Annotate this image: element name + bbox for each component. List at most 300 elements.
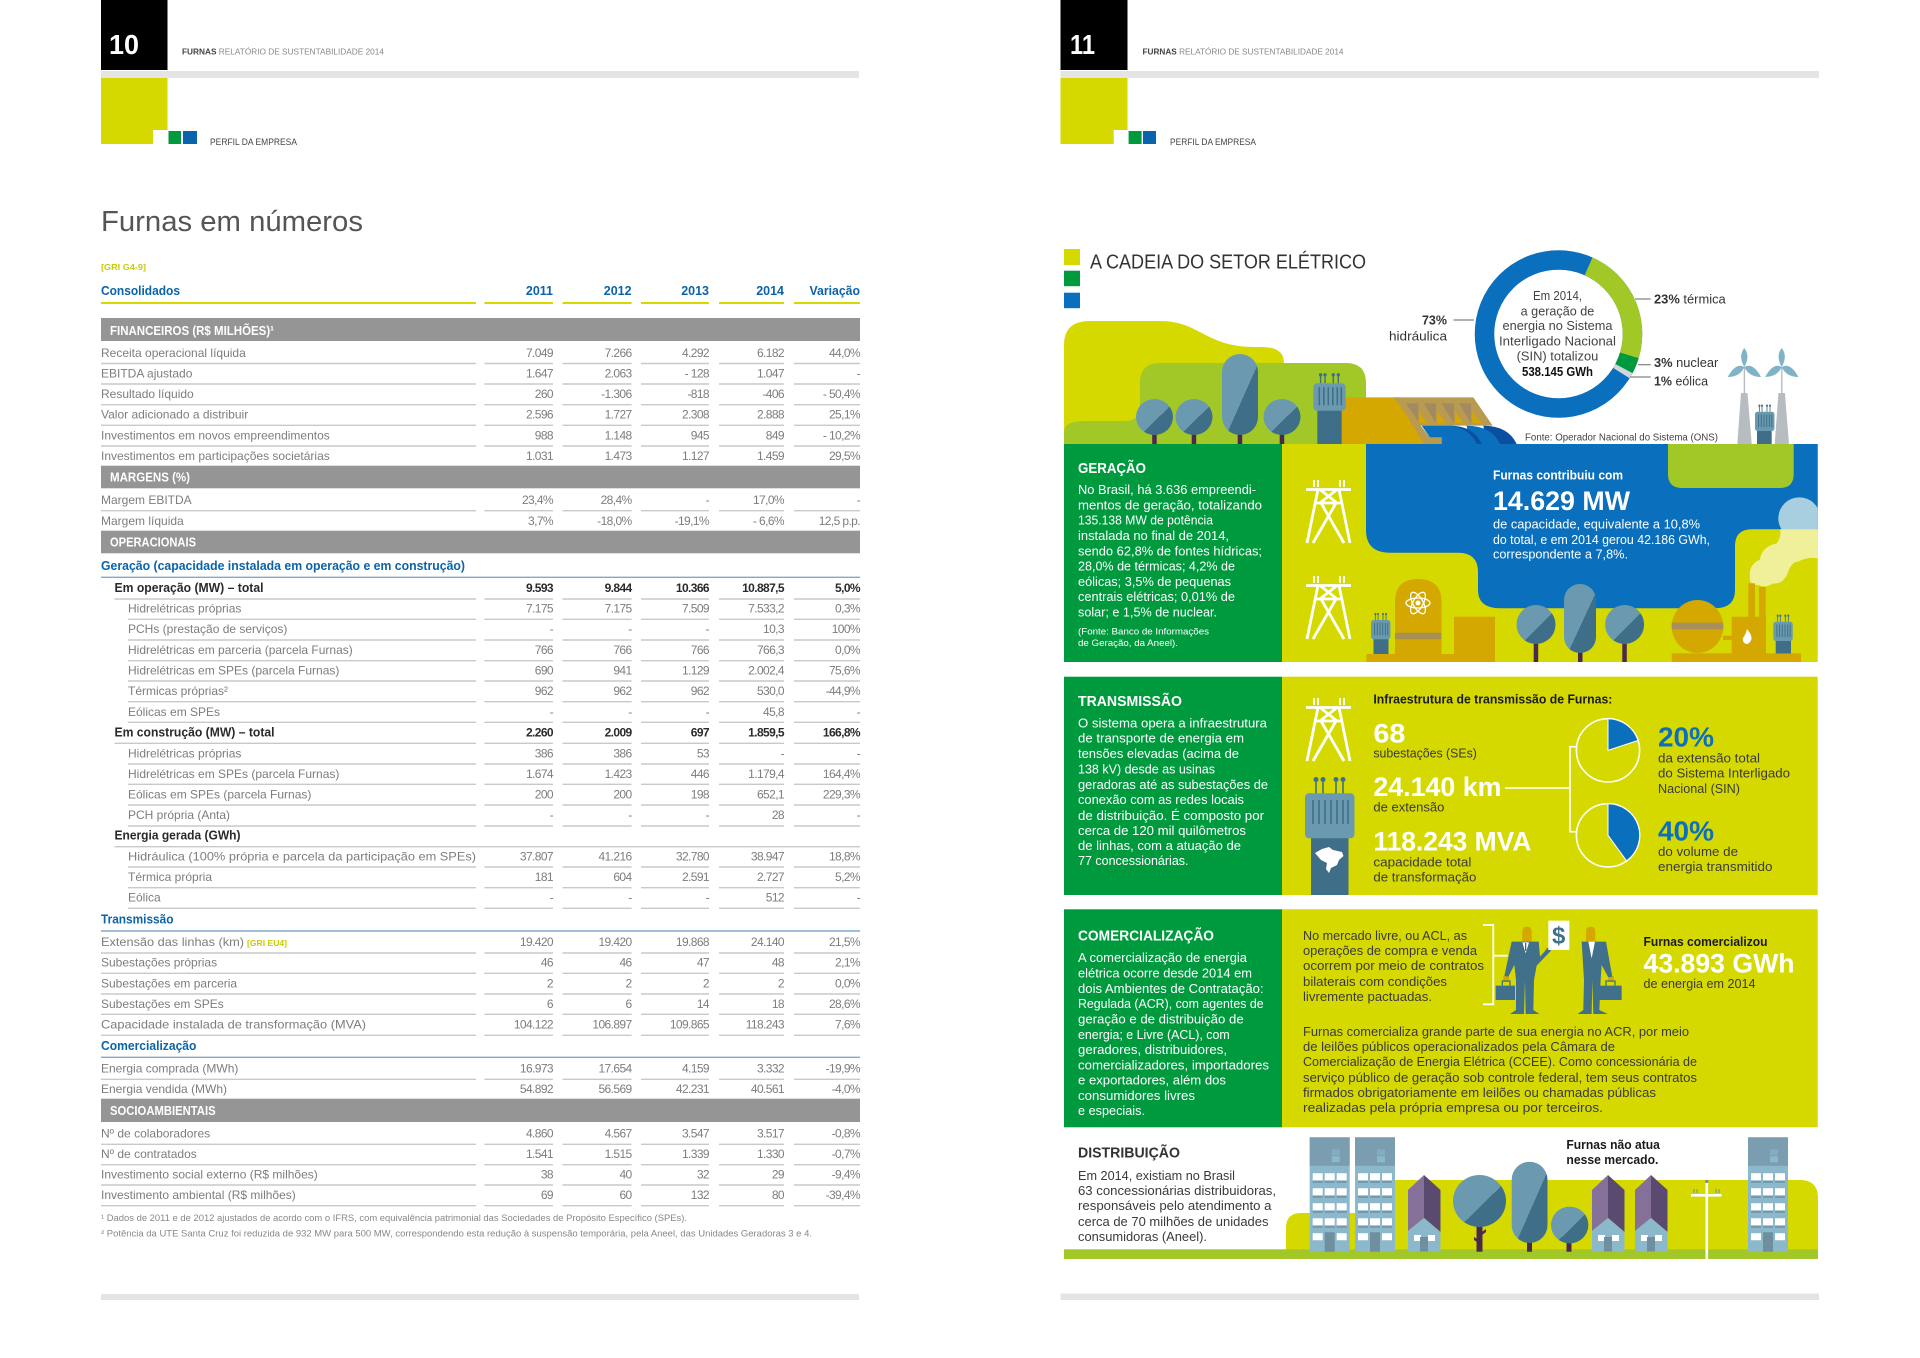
table header: 2012 (604, 284, 632, 298)
subsection: geração: 45,8 (763, 705, 785, 719)
distribuição text: 63 concessionárias distribuidoras, (1078, 1184, 1276, 1198)
pie stat: 20%: Nacional (SIN) (1658, 782, 1740, 796)
subsection: transmissão: 2,1% (835, 956, 861, 970)
source note: Fonte: Operador Nacional do Sistema (ONS) (1525, 432, 1718, 444)
donut centre text: 538.145 GWh (1522, 365, 1593, 379)
transmission stats: de extensão (1373, 800, 1444, 814)
section: financeiros: 1.031 (526, 449, 554, 463)
subsection: transmissão: 6 (547, 997, 554, 1011)
section: financeiros: - 10,2% (823, 428, 861, 442)
subsection: geração: 200 (613, 788, 633, 802)
transmission stats (1373, 692, 1612, 884)
section: margens: Margem EBITDA (101, 493, 192, 507)
pie stat: 20%: 20% (1658, 722, 1714, 753)
subsection: geração: 32.780 (676, 850, 710, 864)
subsection: geração: - (550, 890, 554, 904)
subsection: geração: - (857, 746, 861, 760)
donut centre text: Interligado Nacional (1499, 335, 1616, 349)
heading: a cadeia do setor elétrico: A CADEIA DO SETOR ELÉTRICO (1090, 251, 1366, 274)
subsection: transmissão: 21,5% (829, 935, 861, 949)
subsection: geração: Térmicas próprias² (128, 684, 228, 698)
subsection: geração: 2.260 (526, 726, 554, 740)
subsection: geração: 386 (613, 746, 633, 760)
transmissão heading: TRANSMISSÃO (1078, 692, 1182, 710)
transmission stats: Infraestrutura de transmissão de Furnas: (1373, 692, 1612, 706)
subsection: geração: 2.009 (605, 726, 633, 740)
subsection: transmissão: 46 (541, 956, 554, 970)
subsection: transmissão: 28,6% (829, 997, 861, 1011)
subsection: comercialização: 40.561 (751, 1082, 785, 1096)
section: socioambientais: -9,4% (832, 1168, 861, 1182)
subsection: comercialização: Comercialização (101, 1038, 196, 1053)
subsection: geração: 7.509 (682, 602, 710, 616)
page 11 (1060, 0, 1820, 1300)
mercado livre text: livremente pactuadas. (1303, 990, 1432, 1004)
section: financeiros: 2.308 (682, 408, 710, 422)
pie stat: 40%: do volume de (1658, 845, 1738, 859)
donut chart (1389, 260, 1726, 408)
transmission stats: capacidade total (1373, 856, 1471, 870)
callout: furnas contribuiu (1493, 468, 1710, 562)
section: margens: 17,0% (753, 493, 785, 507)
page 10 header: FURNAS RELATÓRIO DE SUSTENTABILIDADE 2014 (182, 46, 384, 56)
subsection: geração: - (628, 808, 632, 822)
cloud and smoke (1750, 497, 1820, 586)
callout: furnas comercializou: Furnas comercializou (1644, 935, 1768, 949)
subsection: geração: 53 (697, 746, 710, 760)
donut labels (1389, 292, 1726, 388)
subsection: geração: 386 (535, 746, 554, 760)
section: margens: 23,4% (522, 493, 554, 507)
icon: pylon 1 (1306, 480, 1351, 543)
table header: 2011 (526, 284, 553, 298)
section: financeiros: FINANCEIROS (R$ MILHÕES)¹ (110, 323, 274, 338)
section: socioambientais: 4.567 (605, 1126, 633, 1140)
transmissão text: geradoras até as subestações de (1078, 778, 1268, 792)
subsection: geração: 766,3 (757, 643, 785, 657)
subsection: geração: 1.859,5 (748, 726, 785, 740)
subsection: transmissão: 2 (626, 976, 633, 990)
section: socioambientais: 132 (691, 1188, 710, 1202)
section: financeiros: 44,0% (829, 346, 861, 360)
bracket (1483, 925, 1508, 1004)
pie stat: 20% (1658, 722, 1790, 796)
section: socioambientais: SOCIOAMBIENTAIS (110, 1104, 216, 1118)
pie chart: 20% (1576, 719, 1640, 782)
subsection: geração: - (628, 890, 632, 904)
subsection: geração: - (550, 622, 554, 636)
comercialização text: geração e de distribuição de (1078, 1012, 1244, 1026)
subsection: geração: - (550, 705, 554, 719)
donut centre text: energia no Sistema (1502, 319, 1613, 333)
section: financeiros: -1.306 (601, 387, 633, 401)
subsection: geração: 766 (535, 643, 554, 657)
distribuição text: cerca de 70 milhões de unidades (1078, 1215, 1268, 1229)
distribuição text: Em 2014, existiam no Brasil (1078, 1169, 1235, 1183)
geração text: mentos de geração, totalizando (1078, 499, 1262, 513)
subsection: geração: Hidrelétricas em SPEs (parcela Furnas) (128, 767, 339, 781)
landscape hills (1064, 321, 1366, 444)
subsection: geração: - (628, 705, 632, 719)
transmission stats: 118.243 MVA (1373, 826, 1531, 856)
section: financeiros: 1.047 (757, 366, 785, 380)
donut centre text: Em 2014, (1533, 289, 1582, 303)
heading: a cadeia do setor elétrico (1064, 249, 1366, 308)
acr paragraph: de leilões públicos operacionalizados pela Câmara de (1303, 1040, 1615, 1054)
section: margens: MARGENS (%) (110, 470, 190, 484)
section: financeiros: 1.647 (526, 366, 554, 380)
page 11 header: 11 (1070, 29, 1095, 60)
icon: wind turbines (1728, 348, 1798, 444)
section: financeiros: 7.049 (526, 346, 554, 360)
donut labels: 1% eólica (1654, 374, 1708, 388)
comercialização text: A comercialização de energia (1078, 951, 1247, 965)
transmission stats: de transformação (1373, 870, 1476, 884)
panel: comercialização (1064, 909, 1818, 1127)
comercialização text: elétrica ocorre desde 2014 em (1078, 966, 1252, 980)
icon: hydro dam (1342, 397, 1517, 444)
subsection: geração: Térmica própria (128, 870, 212, 884)
subsection: transmissão: 19.868 (676, 935, 710, 949)
page 11 header: PERFIL DA EMPRESA (1170, 137, 1256, 147)
section: socioambientais: 1.339 (682, 1147, 710, 1161)
section: financeiros: 1.473 (605, 449, 633, 463)
subsection: geração: 41.216 (598, 850, 633, 864)
section: socioambientais: 80 (772, 1188, 785, 1202)
subsection: comercialização: 42.231 (676, 1082, 710, 1096)
subsection: transmissão: 0,0% (835, 976, 861, 990)
footnotes: ¹ Dados de 2011 e de 2012 ajustados de acordo com o IFRS, com equivalência patrimonial das Sociedades de Propósito Específico (SPEs). (101, 1213, 687, 1223)
distribuição text: consumidoras (Aneel). (1078, 1230, 1207, 1244)
subsection: transmissão: Subestações em SPEs (101, 997, 224, 1011)
table header: 2014 (756, 284, 784, 298)
subsection: transmissão: 19.420 (598, 935, 633, 949)
subsection: geração: Eólicas em SPEs (parcela Furnas) (128, 788, 311, 802)
distribuição heading: DISTRIBUIÇÃO (1078, 1143, 1180, 1161)
subsection: transmissão: 48 (772, 956, 785, 970)
subsection: geração: Hidrelétricas próprias (128, 602, 241, 616)
subsection: geração: 604 (613, 870, 633, 884)
pie chart: 40% (1576, 804, 1640, 867)
subsection: geração: PCH própria (Anta) (128, 808, 230, 822)
subsection: geração: - (857, 705, 861, 719)
acr paragraph (1303, 1025, 1697, 1115)
subsection: comercialização: 16.973 (520, 1062, 554, 1076)
subsection: geração: 38.947 (751, 850, 785, 864)
pie stat: 20%: da extensão total (1658, 752, 1760, 766)
geração text: solar; e 1,5% de nuclear. (1078, 606, 1217, 620)
subsection: transmissão: 46 (619, 956, 633, 970)
subsection: geração: 9.844 (605, 581, 633, 595)
section: socioambientais: Investimento ambiental (R$ milhões) (101, 1188, 296, 1202)
subsection: geração: Hidrelétricas próprias (128, 746, 241, 760)
subsection: geração: - (706, 890, 710, 904)
subsection: transmissão: Subestações em parceria (101, 976, 237, 990)
subsection: geração: 530,0 (757, 684, 785, 698)
acr paragraph: realizadas pela própria empresa ou por terceiros. (1303, 1101, 1603, 1115)
geração text: 135.138 MW de potência (1078, 514, 1213, 528)
callout: furnas contribuiu: 14.629 MW (1493, 486, 1631, 516)
subsection: geração: 10.366 (676, 581, 710, 595)
subsection: geração: 2.002,4 (748, 664, 785, 678)
section: socioambientais: 60 (619, 1188, 633, 1202)
transmissão text: 77 concessionárias. (1078, 854, 1188, 868)
icon: businessmen: $ (1552, 923, 1565, 950)
icon: buildings (1310, 1137, 1788, 1252)
section: financeiros: 25,1% (829, 408, 861, 422)
subsection: geração: 18,8% (829, 850, 861, 864)
donut labels: 3% nuclear (1654, 356, 1718, 370)
section: financeiros: 2.596 (526, 408, 554, 422)
geração text: de Geração, da Aneel). (1078, 638, 1178, 649)
GRI tag: [GRI G4-9] (101, 262, 146, 272)
brazil map (1315, 847, 1344, 873)
section: socioambientais: 4.860 (526, 1126, 554, 1140)
geração heading: GERAÇÃO (1078, 459, 1146, 477)
subsection: transmissão: 24.140 (751, 935, 785, 949)
subsection: transmissão: 106.897 (592, 1018, 633, 1032)
subsection: comercialização: -19,9% (826, 1062, 861, 1076)
subsection: geração: 2.727 (757, 870, 785, 884)
subsection: comercialização: 4.159 (682, 1062, 710, 1076)
section: financeiros: 7.266 (605, 346, 633, 360)
subsection: comercialização: Energia comprada (MWh) (101, 1062, 238, 1076)
icon: transformer with brazil map (1305, 777, 1354, 895)
geração text: sendo 62,8% de fontes hídricas; (1078, 544, 1262, 558)
comercialização heading: COMERCIALIZAÇÃO (1078, 927, 1214, 945)
section: financeiros (101, 318, 861, 463)
subsection: geração: - (781, 746, 785, 760)
section: margens: - (706, 493, 710, 507)
section: margens: -19,1% (675, 514, 710, 528)
icon: trees (1453, 1162, 1588, 1252)
transmissão text: de distribuição. É composto por (1078, 808, 1264, 823)
subsection: geração: - (857, 890, 861, 904)
subsection: transmissão: Subestações próprias (101, 956, 217, 970)
subsection: transmissão: Transmissão (101, 912, 174, 926)
subsection: geração: 1.129 (682, 664, 710, 678)
subsection: transmissão: 104.122 (514, 1018, 554, 1032)
section: financeiros: - 50,4% (823, 387, 861, 401)
panel: distribuição (1064, 1137, 1818, 1259)
table header: Variação (810, 284, 860, 298)
callout: furnas comercializou: de energia em 2014 (1644, 977, 1756, 991)
subsection: geração: - (857, 808, 861, 822)
subsection: comercialização (101, 1038, 861, 1096)
comercialização text: Regulada (ACR), com agentes de (1078, 997, 1264, 1011)
geração text: No Brasil, há 3.636 empreendi- (1078, 483, 1256, 497)
subsection: geração: 10.887,5 (742, 581, 785, 595)
page 10 (101, 0, 861, 1300)
section: socioambientais: 38 (541, 1168, 554, 1182)
comercialização text: consumidores livres (1078, 1089, 1195, 1103)
subsection: transmissão: 109.865 (670, 1018, 710, 1032)
title: Furnas em números (101, 206, 363, 238)
pie stat: 40%: energia transmitido (1658, 860, 1773, 874)
section: margens: Margem líquida (101, 514, 184, 528)
section: financeiros: 6.182 (757, 346, 785, 360)
section: financeiros: 29,5% (829, 449, 861, 463)
icon: houses (1408, 1175, 1668, 1252)
panel: transmissão (1064, 677, 1818, 895)
subsection: transmissão: 2 (778, 976, 785, 990)
section: financeiros: Investimentos em novos empreendimentos (101, 428, 330, 442)
footnotes: ² Potência da UTE Santa Cruz foi reduzida de 932 MW para 500 MW, correspondendo esta redução à suspensão temporária, pela Aneel, das Unidades Geradoras 3 e 4. (101, 1228, 812, 1238)
section: financeiros: -406 (762, 387, 785, 401)
section: socioambientais: -0,8% (832, 1126, 861, 1140)
subsection: comercialização: 56.569 (598, 1082, 633, 1096)
section: socioambientais (101, 1099, 861, 1206)
mercado livre text: bilaterais com condições (1303, 975, 1447, 989)
subsection: geração: Eólicas em SPEs (128, 705, 220, 719)
callout: furnas não atua (1566, 1138, 1661, 1167)
callout: furnas contribuiu: correspondente a 7,8%. (1493, 548, 1628, 562)
subsection: geração: - (706, 808, 710, 822)
subsection: geração: 28 (772, 808, 785, 822)
geração text: centrais elétricas; 0,01% de (1078, 590, 1235, 604)
callout: furnas comercializou: 43.893 GWh (1644, 949, 1794, 979)
subsection: geração: - (628, 622, 632, 636)
icon: transformer on hill (1313, 373, 1346, 444)
section: margens (101, 466, 861, 528)
callout: furnas contribuiu: do total, e em 2014 gerou 42.186 GWh, (1493, 533, 1710, 547)
callout: furnas não atua: Furnas não atua (1566, 1138, 1661, 1152)
subsection: transmissão: 7,6% (835, 1018, 861, 1032)
comercialização text (1078, 951, 1269, 1118)
icon: thermal plant (1672, 583, 1801, 662)
subsection: geração: 512 (766, 890, 785, 904)
subsection: comercialização: 3.332 (757, 1062, 785, 1076)
subsection: transmissão: 118.243 (746, 1018, 785, 1032)
section: financeiros: 1.727 (605, 408, 633, 422)
panel: geração (1064, 444, 1820, 662)
section: socioambientais: 1.515 (605, 1147, 633, 1161)
subsection: geração: 100% (832, 622, 861, 636)
section: financeiros: 2.888 (757, 408, 785, 422)
subsection: comercialização: 17.654 (598, 1062, 633, 1076)
geração text: instalada no final de 2014, (1078, 529, 1229, 543)
section: socioambientais: 1.330 (757, 1147, 785, 1161)
acr paragraph: firmados obrigatoriamente em leilões ou chamadas públicas (1303, 1086, 1656, 1100)
geração text: (Fonte: Banco de Informações (1078, 626, 1209, 638)
section: socioambientais: Investimento social externo (R$ milhões) (101, 1168, 318, 1182)
subsection: transmissão: 6 (626, 997, 633, 1011)
section: operacionais (101, 531, 861, 1096)
distribuição text: responsáveis pelo atendimento a (1078, 1199, 1272, 1213)
transmissão text: de transporte de energia em (1078, 732, 1244, 746)
transmission stats: subestações (SEs) (1373, 746, 1477, 760)
subsection: geração: 198 (691, 788, 710, 802)
comercialização text: comercializadores, importadores (1078, 1058, 1269, 1072)
subsection: comercialização: 54.892 (520, 1082, 554, 1096)
transmissão text: 138 kV) desde as usinas (1078, 762, 1215, 776)
subsection: geração: 164,4% (823, 767, 861, 781)
transmissão text: conexão com as redes locais (1078, 793, 1244, 807)
section: financeiros: 1.148 (605, 428, 633, 442)
section: socioambientais: -39,4% (826, 1188, 861, 1202)
icon: nuclear plant (1366, 579, 1495, 662)
mercado livre text: operações de compra e venda (1303, 944, 1477, 958)
subsection: transmissão: 2 (703, 976, 710, 990)
subsection: geração: 181 (535, 870, 554, 884)
section: margens: - 6,6% (753, 514, 785, 528)
subsection: geração: 7.175 (605, 602, 633, 616)
callout: furnas contribuiu: de capacidade, equivalente a 10,8% (1493, 518, 1700, 532)
subsection: geração: Hidráulica (100% própria e parcela da participação em SPEs) (128, 850, 476, 864)
donut centre text (1499, 289, 1616, 379)
subsection: geração: 10,3 (763, 622, 785, 636)
comercialização text: geradores, distribuidores, (1078, 1043, 1227, 1057)
subsection: geração (101, 558, 861, 908)
subsection: geração: 697 (691, 726, 710, 740)
section: socioambientais: -0,7% (832, 1147, 861, 1161)
trees on hill (1136, 354, 1300, 444)
subsection: geração: Em construção (MW) – total (114, 726, 274, 740)
subsection: geração: Em operação (MW) – total (114, 581, 264, 595)
mercado livre text: No mercado livre, ou ACL, as (1303, 929, 1467, 943)
subsection: transmissão: 18 (772, 997, 785, 1011)
comercialização text: e especiais. (1078, 1104, 1145, 1118)
subsection: comercialização: -4,0% (832, 1082, 861, 1096)
section: financeiros: Resultado líquido (101, 387, 194, 401)
section: financeiros: 849 (766, 428, 785, 442)
subsection: geração: PCHs (prestação de serviços) (128, 622, 287, 636)
blue furnas area (1366, 444, 1818, 608)
section: financeiros: 2.063 (605, 366, 633, 380)
subsection: transmissão: [GRI EU4] (247, 938, 287, 948)
table header: 2013 (681, 284, 709, 298)
transmissão text: tensões elevadas (acima de (1078, 747, 1239, 761)
subsection: geração: 7.533,2 (748, 602, 785, 616)
connector (1505, 747, 1577, 832)
donut labels: hidráulica (1389, 330, 1447, 344)
subsection: geração: 1.674 (526, 767, 554, 781)
pie stat: 40%: 40% (1658, 816, 1714, 847)
section: socioambientais: Nº de colaboradores (101, 1126, 210, 1140)
section: financeiros: 260 (535, 387, 554, 401)
subsection: geração: 0,3% (835, 602, 861, 616)
section: margens: 12,5 p.p. (819, 514, 860, 528)
comercialização text: e exportadores, além dos (1078, 1074, 1226, 1088)
table header: Consolidados (101, 283, 180, 298)
donut centre text: (SIN) totalizou (1517, 350, 1598, 364)
subsection: geração: -44,9% (826, 684, 861, 698)
section: socioambientais: 32 (697, 1168, 710, 1182)
subsection: transmissão: 47 (697, 956, 710, 970)
subsection: geração: 9.593 (526, 581, 554, 595)
subsection: geração: 941 (613, 664, 633, 678)
subsection: geração: 2.591 (682, 870, 710, 884)
section: operacionais: OPERACIONAIS (110, 536, 196, 550)
subsection: geração: 5,2% (835, 870, 861, 884)
comercialização text: energia; e Livre (ACL), com (1078, 1028, 1230, 1042)
section: socioambientais: 40 (619, 1168, 633, 1182)
acr paragraph: Furnas comercializa grande parte de sua energia no ACR, por meio (1303, 1025, 1689, 1039)
subsection: geração: 166,8% (823, 726, 861, 740)
table header (101, 283, 860, 303)
page 11 header (1060, 0, 1819, 147)
section: financeiros: EBITDA ajustado (101, 366, 193, 380)
subsection: geração: Eólica (128, 890, 161, 904)
subsection: geração: 7.175 (526, 602, 554, 616)
transmissão text: O sistema opera a infraestrutura (1078, 716, 1267, 730)
transmission stats: 24.140 km (1373, 772, 1501, 802)
transmission stats: 68 (1373, 719, 1405, 749)
subsection: geração: 75,6% (829, 664, 861, 678)
pie stat: 40% (1658, 816, 1773, 874)
section: socioambientais: Nº de contratados (101, 1147, 197, 1161)
subsection: geração: 766 (691, 643, 710, 657)
